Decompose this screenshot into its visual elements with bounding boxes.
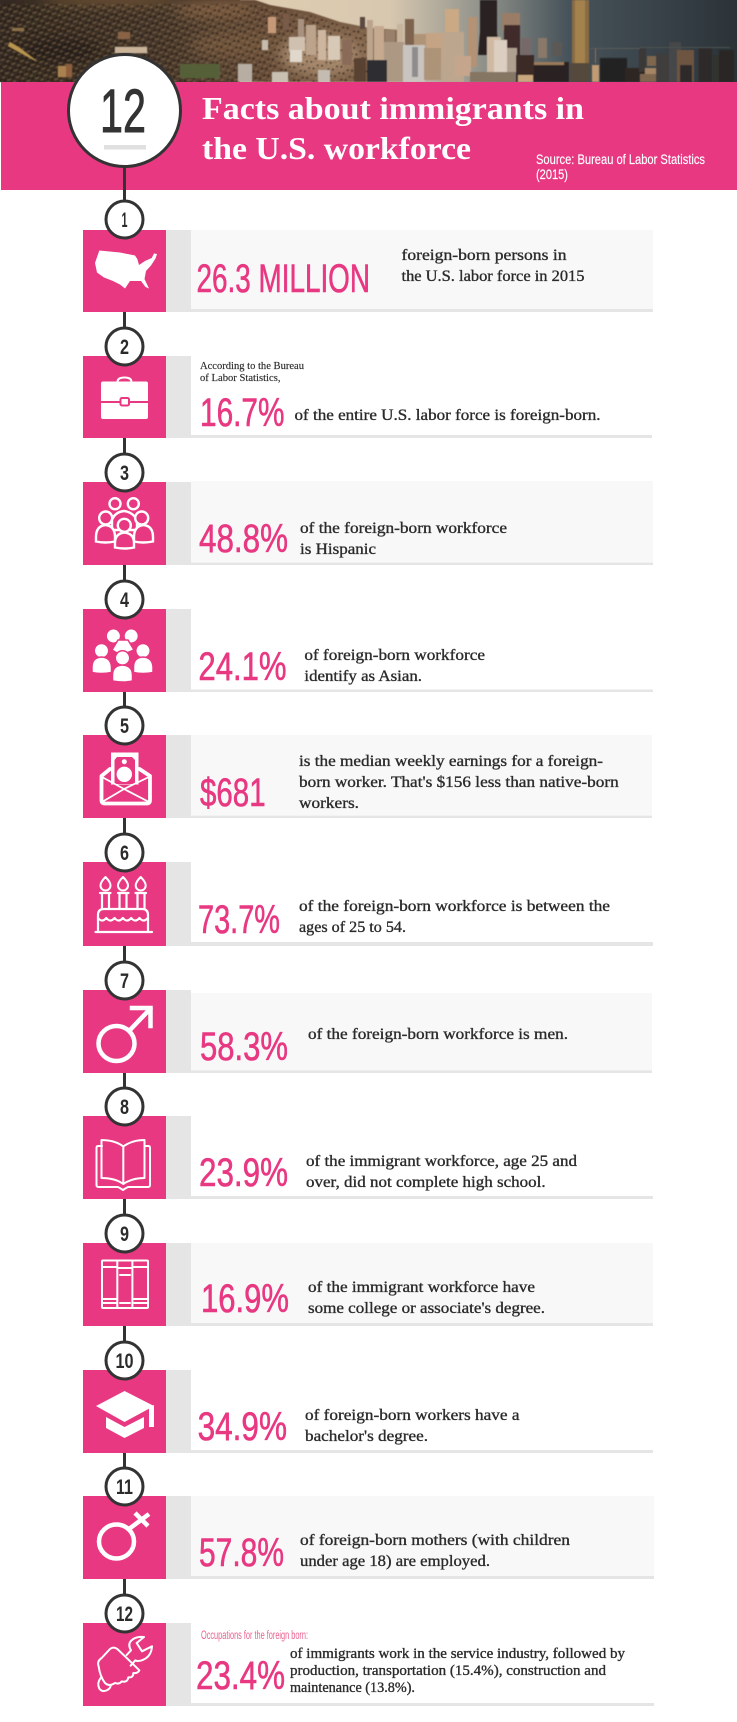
text 6 [299,898,610,936]
stat 12: 23.4% [196,1654,285,1698]
badge 3: 3 [120,462,129,485]
fact 1 [83,201,653,312]
stat 5: $681 [200,771,266,815]
fact 5 [83,707,652,818]
badge 9 [106,1215,143,1252]
icon: USA map [95,250,157,288]
text 10 [305,1407,520,1445]
timeline connector [123,165,126,1609]
badge 11 [106,1468,143,1505]
badge 12: 12 [116,1603,133,1626]
badge 10: 10 [116,1350,134,1373]
badge 12 [106,1595,143,1632]
text 12 [290,1646,626,1696]
stat 2: 16.7% [200,391,284,435]
fact 11 [83,1468,654,1579]
text 9: of the immigrant workforce have [308,1279,535,1296]
text 11 [300,1532,570,1570]
stat 1: 26.3 MILLION [196,257,370,301]
text 12: maintenance (13.8%). [290,1680,415,1696]
occupations note: Occupations for the foreign born: [201,1630,308,1642]
stat 7: 58.3% [200,1025,288,1069]
icon: people solid [92,629,153,682]
text 3: of the foreign-born workforce [300,520,507,537]
badge 9: 9 [120,1223,129,1246]
text 5 [299,753,619,812]
icon: birthday cake [96,877,152,932]
text 3: is Hispanic [300,541,376,558]
text 8: of the immigrant workforce, age 25 and [306,1153,577,1170]
badge 4 [106,581,143,618]
badge 2 [106,328,143,365]
title banner [1,82,737,190]
text 5: workers. [299,795,359,812]
icon: plug and wrench [98,1637,152,1691]
stat 3: 48.8% [199,517,288,561]
badge 11: 11 [116,1476,133,1499]
text 5: born worker. That's $156 less than native-born [299,774,619,791]
text 9 [308,1279,545,1317]
stat 4: 24.1% [198,645,287,689]
title: the U.S. workforce [202,130,471,166]
text 11: of foreign-born mothers (with children [300,1532,570,1549]
big number badge [68,54,180,166]
icon: books [102,1260,148,1308]
source note [536,152,705,182]
text 2: of the entire U.S. labor force is foreign-born. [294,407,600,424]
stat 10: 34.9% [198,1405,287,1449]
text 4: of foreign-born workforce [304,647,485,664]
text 10: of foreign-born workers have a [305,1407,520,1424]
text 11: under age 18) are employed. [300,1553,490,1570]
icon: female symbol [99,1513,149,1558]
badge 6 [106,834,143,871]
stat 9: 16.9% [201,1277,289,1321]
fact 4 [83,581,653,692]
fact 12 [83,1595,654,1706]
badge 2: 2 [120,336,129,359]
text 1: foreign-born persons in [402,247,566,264]
badge 10 [106,1342,143,1379]
title: Facts about immigrants in [202,90,584,126]
icon: briefcase [101,378,148,419]
text 6: of the foreign-born workforce is between the [299,898,610,915]
fact 7 [83,962,652,1073]
text 4: identify as Asian. [304,668,422,685]
badge 5: 5 [120,715,129,738]
header photo: city skyline [0,0,737,82]
badge 1: 1 [122,209,128,232]
text 10: bachelor's degree. [305,1428,428,1445]
stat 8: 23.9% [199,1151,288,1195]
text 8: over, did not complete high school. [306,1174,546,1191]
text 7: of the foreign-born workforce is men. [308,1026,568,1043]
lead-in [200,361,305,384]
fact 10 [83,1342,653,1453]
icon: envelope with money [102,752,150,804]
text 1: the U.S. labor force in 2015 [402,268,584,285]
text 8 [306,1153,577,1191]
fact 3 [83,454,653,565]
text 9: some college or associate's degree. [308,1300,545,1317]
icon: open book [96,1140,150,1190]
source note: (2015) [536,167,568,182]
icon: graduation cap [96,1391,154,1438]
text 4 [304,647,485,685]
lead-in: of Labor Statistics, [200,373,280,384]
text 1 [402,247,584,285]
badge 4: 4 [120,589,129,612]
text 5: is the median weekly earnings for a foreign- [299,753,603,770]
big number badge: 12 [100,77,146,145]
text 12: of immigrants work in the service industry, followed by [290,1646,626,1662]
badge 6: 6 [120,842,129,865]
badge 1 [106,201,143,238]
badge 3 [106,454,143,491]
badge 7: 7 [120,970,129,993]
icon: male symbol [98,1008,150,1061]
title [202,90,584,166]
stat 11: 57.8% [199,1531,284,1575]
lead-in: According to the Bureau [200,361,305,372]
fact 2 [83,328,652,438]
icon: people outline [96,498,153,548]
badge 8: 8 [120,1096,129,1119]
source note: Source: Bureau of Labor Statistics [536,152,705,167]
stat 6: 73.7% [198,898,280,942]
badge 5 [106,707,143,744]
text 12: production, transportation (15.4%), construction and [290,1663,607,1679]
fact 9 [83,1215,653,1326]
fact 6 [83,834,653,946]
text 6: ages of 25 to 54. [299,919,406,936]
badge 8 [106,1088,143,1125]
text 3 [300,520,507,558]
fact 8 [83,1088,653,1199]
badge 7 [106,962,143,999]
